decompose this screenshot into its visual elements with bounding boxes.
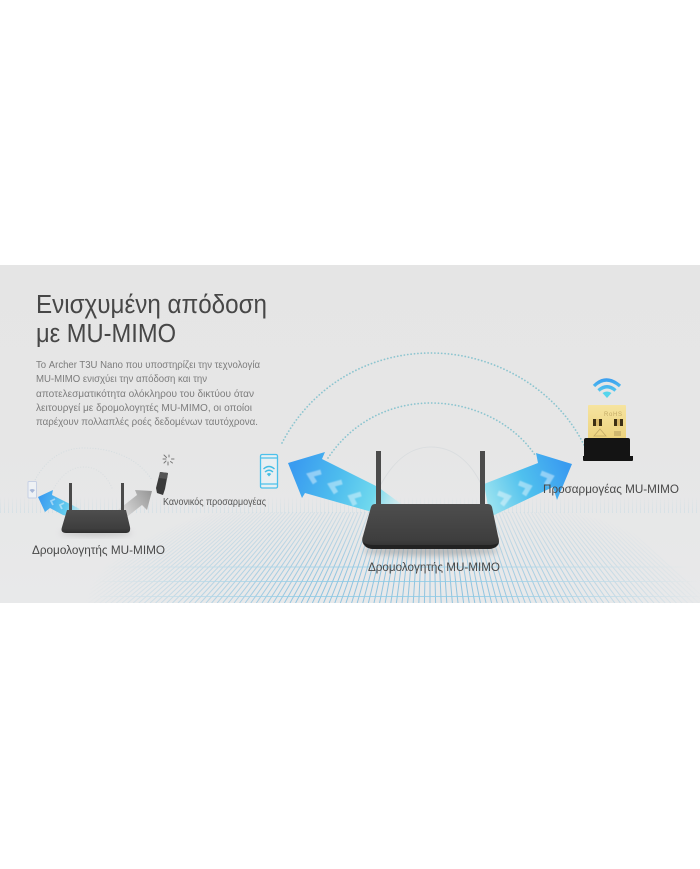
description text: αποτελεσματικότητα ολόκληρου του δικτύου όταν (36, 388, 254, 400)
title: με MU-MIMO (36, 320, 176, 348)
description text: MU-MIMO ενισχύει την απόδοση και την (36, 373, 207, 385)
chevrons in left arrow (310, 472, 361, 505)
dotted signal arcs: large router (282, 353, 585, 458)
adapter contacts (593, 419, 623, 426)
chevrons in right arrow (498, 473, 551, 505)
arrow: small router to device (38, 490, 80, 517)
description text: Το Archer T3U Nano που υποστηρίζει την τεχνολογία (36, 359, 260, 371)
grid floor (105, 512, 686, 603)
panel: MU-MIMO background (0, 265, 700, 603)
title (36, 291, 267, 348)
icon: normal adapter (156, 472, 168, 495)
icon: small phone (28, 482, 36, 498)
MU-MIMO USB adapter (583, 405, 633, 461)
label: MU-MIMO adapter: Προσαρμογέας MU-MIMO (543, 482, 679, 496)
description text (36, 359, 260, 428)
arrow: large router to phone (288, 452, 404, 512)
description text: λειτουργεί με δρομολογητές MU-MIMO, οι οποίοι (36, 402, 252, 414)
adapter markings: RoHS (604, 412, 622, 418)
icon: phone with wifi (260, 454, 278, 488)
title: Ενισχυμένη απόδοση (36, 291, 267, 319)
arrow: small router to normal adapter, grey (118, 490, 152, 518)
description text: παρέχουν πολλαπλές ροές δεδομένων ταυτόχρονα. (36, 416, 258, 428)
arrow: large router to MU-MIMO adapter (484, 453, 572, 517)
dotted signal arcs: small router (34, 448, 152, 488)
icon: wifi signal (594, 380, 620, 398)
large router (362, 451, 499, 556)
icon: loading spinner (163, 455, 174, 465)
label: small router: Δρομολογητής MU-MIMO (32, 543, 165, 557)
faint arc above large router (380, 447, 482, 486)
adapter black housing (583, 438, 633, 461)
small router (38, 483, 152, 536)
horizon band (0, 504, 697, 513)
label: large router: Δρομολογητής MU-MIMO (368, 560, 500, 574)
label: normal adapter: Κανονικός προσαρμογέας (163, 497, 266, 508)
